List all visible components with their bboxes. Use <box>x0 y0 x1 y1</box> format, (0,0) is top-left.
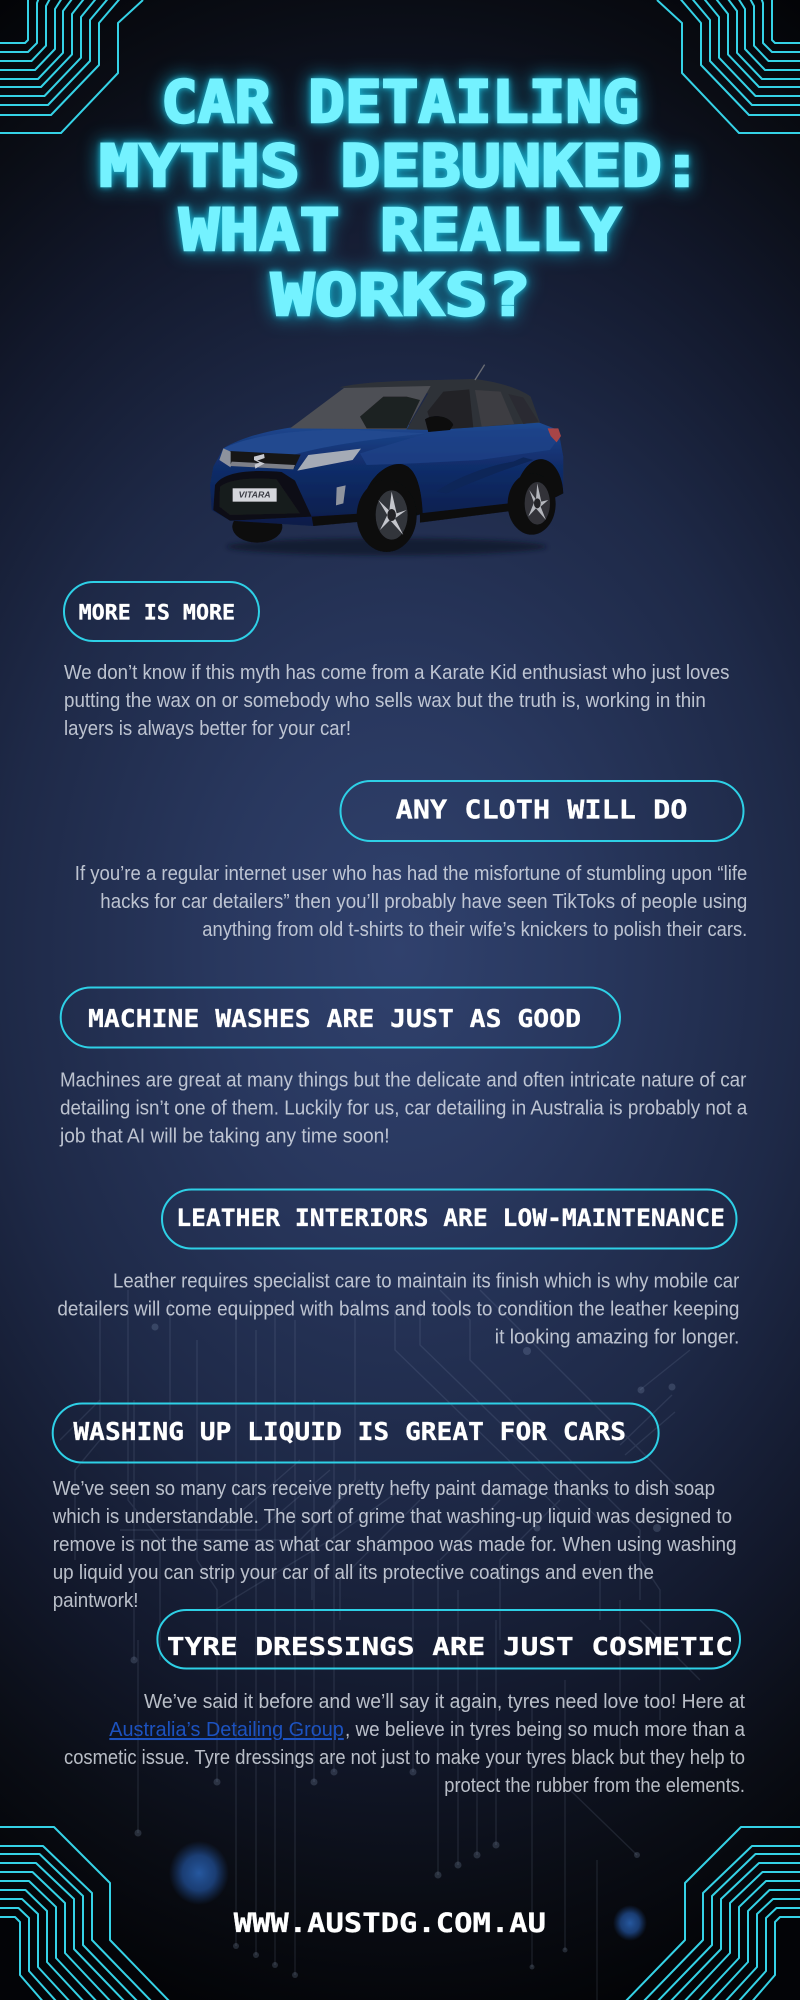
text block: more is more: putting the wax on or somebody who sells wax but the truth is, working in thin <box>64 689 706 712</box>
text block: more is more: We don’t know if this myth has come from a Karate Kid enthusiast who just loves <box>64 661 729 684</box>
text block: tyre dressings <box>64 1690 746 1797</box>
corner circuit lines: bottom right <box>622 1827 800 2000</box>
icon: blue SUV car <box>210 365 563 555</box>
text block: machine washes: detailing isn’t one of them. Luckily for us, car detailing in Australia is probably not a <box>60 1097 748 1120</box>
title: WORKS? <box>271 262 531 329</box>
front wheel <box>357 480 417 552</box>
roof <box>339 379 540 430</box>
rear wheel <box>508 473 556 535</box>
text block: any cloth will do: hacks for car detailers” then you’ll probably have seen TikToks of people using <box>100 890 747 913</box>
footer website url: WWW.AUSTDG.COM.AU <box>234 1908 546 1939</box>
glowing blue light spots <box>169 1841 647 1941</box>
corner circuit lines: top right <box>657 0 800 133</box>
text block: machine washes: Machines are great at many things but the delicate and often intricate nature of car <box>60 1069 747 1092</box>
heading pill: more is more: MORE IS MORE <box>79 600 235 624</box>
title <box>99 69 702 329</box>
number plate <box>233 488 277 502</box>
fog light <box>336 485 346 505</box>
heading pill: leather interiors: LEATHER INTERIORS ARE LOW-MAINTENANCE <box>176 1204 725 1232</box>
corner circuit lines: bottom left <box>0 1827 173 2000</box>
heading pill: tyre dressings: TYRE DRESSINGS ARE JUST COSMETIC <box>167 1632 733 1661</box>
text block: machine washes: job that AI will be taking any time soon! <box>59 1125 390 1148</box>
text block: any cloth will do: anything from old t-shirts to their wife’s knickers to polish their cars. <box>202 918 747 941</box>
text block: washing up liquid: We’ve seen so many cars receive pretty hefty paint damage thanks to dish soap <box>53 1477 715 1500</box>
car body <box>210 422 563 526</box>
text block: leather interiors <box>57 1269 739 1348</box>
heading pill: washing up liquid: WASHING UP LIQUID IS GREAT FOR CARS <box>73 1417 626 1446</box>
heading pill: leather interiors <box>162 1190 736 1248</box>
heading pill: tyre dressings <box>157 1610 740 1668</box>
text block: leather interiors: detailers will come equipped with balms and tools to condition the leather keeping <box>57 1297 739 1320</box>
heading pill: machine washes: MACHINE WASHES ARE JUST AS GOOD <box>88 1004 581 1033</box>
text block: any cloth will do <box>75 862 747 941</box>
sills and arches <box>420 503 515 523</box>
front left wheel <box>232 511 282 543</box>
title: CAR DETAILING <box>161 69 639 136</box>
side windows <box>427 389 473 430</box>
heading pill: any cloth will do <box>340 781 744 841</box>
icon: blue SUV car: VITARA <box>239 491 271 500</box>
text block: leather interiors: it looking amazing for longer. <box>495 1325 739 1348</box>
antenna <box>475 365 485 380</box>
title: MYTHS DEBUNKED: <box>99 133 702 200</box>
windshield <box>290 386 431 429</box>
heading pill: machine washes <box>61 988 620 1048</box>
text block: any cloth will do: If you’re a regular internet user who has had the misfortune of stumbling upon “life <box>75 862 747 885</box>
suzuki badge <box>254 454 265 469</box>
text block: tyre dressings: We’ve said it before and we’ll say it again, tyres need love too! Here at <box>144 1690 745 1713</box>
text block: washing up liquid: paintwork! <box>53 1589 139 1612</box>
text block: more is more: layers is always better for your car! <box>64 717 351 740</box>
front grille and bumper <box>213 471 312 521</box>
heading pill: washing up liquid <box>53 1404 659 1462</box>
text block: leather interiors: Leather requires specialist care to maintain its finish which is why mobile car <box>113 1269 739 1292</box>
text block: tyre dressings: Australia’s Detailing Group <box>109 1718 344 1741</box>
text block: washing up liquid: which is understandable. The sort of grime that washing-up liquid was designed to <box>52 1505 732 1528</box>
text block: washing up liquid: up liquid you can strip your car of all its protective coatings and even the <box>53 1561 654 1584</box>
title: WHAT REALLY <box>179 197 621 264</box>
text block: more is more <box>64 661 729 740</box>
text block: machine washes <box>59 1069 748 1148</box>
circuit board background pattern <box>60 1290 700 2000</box>
tail light <box>548 428 561 442</box>
headlight <box>297 449 361 471</box>
text block: washing up liquid <box>52 1477 736 1612</box>
text block: tyre dressings: , we believe in tyres being so much more than a <box>345 1718 746 1741</box>
heading pill: more is more <box>64 582 259 641</box>
corner circuit lines: top left <box>0 0 143 133</box>
text block: washing up liquid: remove is not the same as what car shampoo was made for. When using washing <box>53 1533 736 1556</box>
heading pill: any cloth will do: ANY CLOTH WILL DO <box>396 796 687 826</box>
text block: tyre dressings: protect the rubber from the elements. <box>444 1774 745 1797</box>
mirror <box>425 416 453 432</box>
